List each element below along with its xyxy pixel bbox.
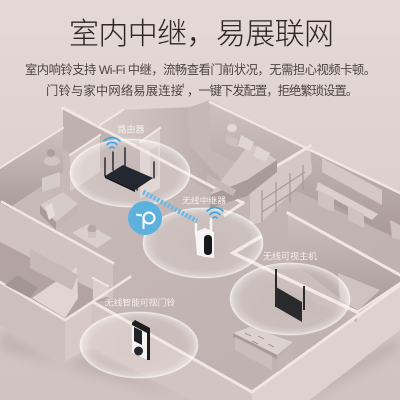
label: host: 无线可视主机	[263, 250, 317, 262]
bed	[207, 124, 277, 208]
connection arrows	[143, 192, 197, 221]
isometric floor plan	[0, 100, 400, 400]
front wall face	[88, 303, 252, 400]
host room bench	[338, 273, 380, 310]
relay icon	[195, 219, 214, 258]
front right wall face	[252, 285, 400, 400]
wall below relay room	[233, 253, 357, 322]
partition wall behind router	[140, 128, 160, 198]
upper room floor	[100, 108, 243, 203]
label: router: 路由器	[117, 124, 145, 134]
bedroom back wall	[210, 102, 400, 240]
router icon	[105, 148, 154, 192]
lower room tv cabinet	[30, 249, 78, 290]
bookcase wall	[250, 147, 312, 225]
lower left rug	[5, 275, 38, 298]
description text: 4	[181, 84, 185, 90]
coverage oval: host	[230, 263, 350, 335]
small stub wall	[93, 278, 108, 302]
coverage oval: relay	[143, 208, 263, 278]
label: doorbell: 无线智能可视门铃	[105, 296, 175, 308]
lamp side table	[42, 149, 60, 192]
host icon	[276, 269, 304, 322]
icon: logo badge	[128, 201, 162, 235]
study desk and chairs	[316, 158, 400, 240]
description text	[25, 62, 376, 98]
dining table	[233, 327, 294, 372]
title: 室内中继，易展联网	[69, 18, 334, 51]
sofa	[40, 192, 78, 230]
corner wall face	[65, 303, 93, 362]
coverage oval: doorbell	[80, 312, 198, 378]
router room wall face	[63, 108, 140, 185]
coverage oval: router	[70, 139, 190, 207]
description text: 门铃与家中网络易展连接	[46, 83, 183, 98]
icon: wifi router	[104, 138, 120, 148]
interior wall face, living room	[0, 203, 113, 300]
wall tops	[0, 102, 400, 392]
host room back wall	[288, 213, 400, 312]
house shadow	[0, 328, 400, 400]
bookcase shelves	[262, 165, 305, 222]
doorbell icon	[132, 320, 150, 360]
lower left room floor	[0, 242, 113, 320]
icon: wifi relay	[207, 208, 223, 218]
hall wall block	[188, 101, 210, 156]
label: relay: 无线中继器	[182, 194, 226, 206]
interior bright partition	[32, 267, 78, 318]
description text: 室内响铃支持 Wi-Fi 中继，流畅查看门前状况，无需担心视频卡顿。	[25, 62, 376, 77]
floor	[0, 100, 400, 392]
description text: ，一键下发配置，拒绝繁琐设置。	[187, 83, 358, 98]
coffee table and plant	[72, 224, 112, 248]
outer left wall face	[0, 282, 65, 362]
left back wall face	[0, 129, 63, 214]
small partition wall	[70, 135, 100, 192]
